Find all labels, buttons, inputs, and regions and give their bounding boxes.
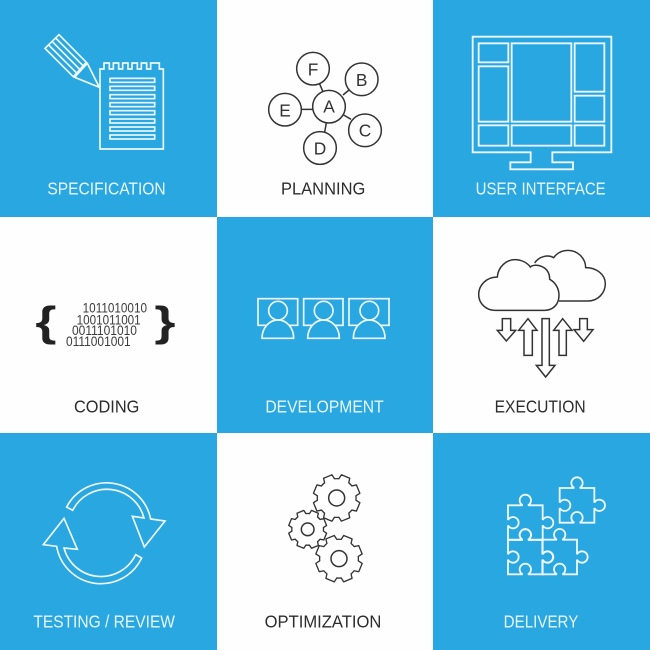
icon: circular arrows [43,483,165,584]
label: user interface: USER INTERFACE [476,178,606,198]
icon: binary code in braces: 1001011001 [77,312,141,327]
label: development: DEVELOPMENT [265,397,384,417]
icon: mind map with letter nodes: A [323,97,335,117]
icon: front cloud [479,260,559,310]
icon: pencil writing on notepad [45,35,163,149]
icon: binary code in braces: 0011101010 [72,323,137,338]
icon: three people at screens [258,299,389,338]
icon: three gears [283,468,369,589]
arrow: clockwise bottom [43,518,142,584]
panel: development [217,217,434,434]
label: specification: SPECIFICATION [47,178,166,198]
icon: top gear [306,468,367,528]
icon: mind map with letter nodes: E [279,100,291,120]
arrow: short down right [574,319,593,341]
icon: mind map with letter nodes [269,52,381,164]
icon: mind map with letter nodes: F [308,59,318,79]
icon: person three [349,299,389,338]
icon: binary code in braces: } [154,299,176,345]
panel: optimization [217,433,434,650]
label: coding: CODING [74,397,139,417]
arrow: up left [519,319,537,355]
icon: puzzle pieces [508,477,605,574]
panel: planning [217,0,434,217]
icon: binary code in braces: 1011010010 [83,301,147,316]
label: testing / review: TESTING / REVIEW [33,611,175,631]
icon: monitor with layout panes [473,37,611,169]
label: delivery: DELIVERY [504,611,579,631]
label: planning: PLANNING [281,178,365,198]
icon: small gear [283,505,332,554]
arrow: up right [554,319,572,355]
icon: pencil [45,35,99,87]
arrow: clockwise top [67,483,165,547]
panel: execution [433,217,650,434]
label: optimization: OPTIMIZATION [265,611,381,631]
icon: mind map with letter nodes: C [359,120,371,140]
label: execution: EXECUTION [495,397,586,417]
icon: bottom gear [309,528,369,589]
arrow: short down left [497,319,516,341]
icon: person one [258,299,298,338]
panel: specification [0,0,217,217]
icon: back cloud [535,250,605,301]
icon: binary code in braces: 0111001001 [66,334,131,349]
icon: mind map with letter nodes: D [314,138,326,158]
icon: binary code in braces [35,299,176,349]
panel: user interface [433,0,650,217]
icon: notepad [100,63,163,149]
icon: binary code in braces: { [35,299,56,345]
arrow: long down [536,319,555,377]
panel: delivery [433,433,650,650]
panel: testing and review [0,433,217,650]
icon: clouds with transfer arrows [479,250,605,377]
panel: coding [0,217,217,434]
icon: person two [304,299,343,338]
icon: mind map with letter nodes: B [356,70,367,90]
